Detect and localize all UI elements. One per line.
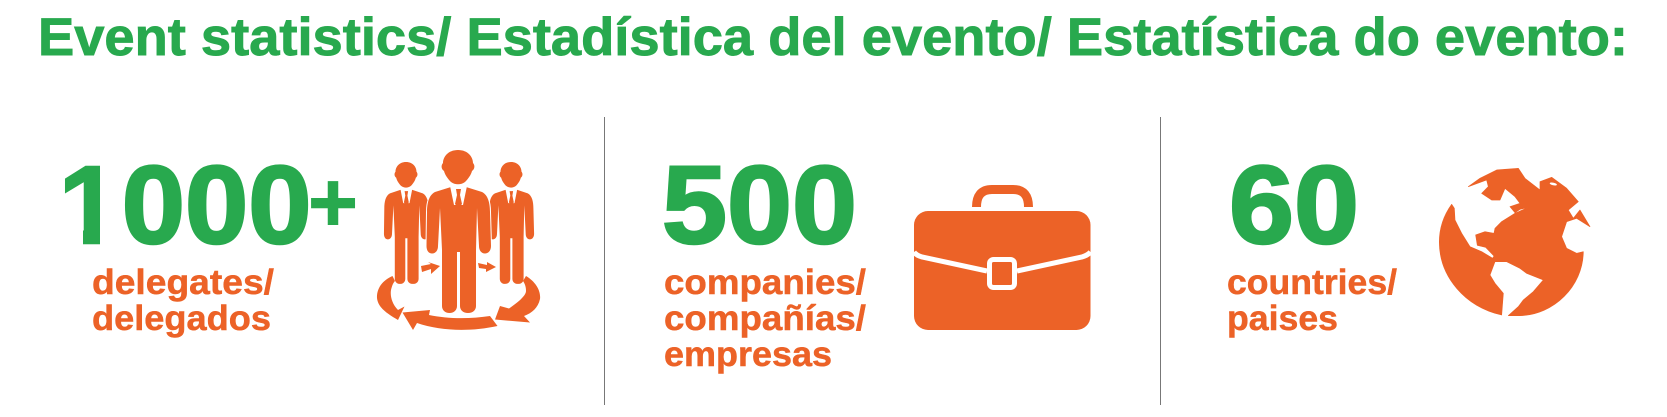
- icon: briefcase: [914, 190, 1090, 330]
- title: Event statistics/ Estadística del evento/ Estatística do evento:: [38, 8, 1628, 67]
- centre person: [426, 150, 491, 313]
- label: delegates: [92, 263, 274, 338]
- icon: business people with arrows: [377, 150, 540, 330]
- label: countries: countries/: [1227, 263, 1397, 302]
- panel: countries: [1227, 144, 1590, 338]
- number: 1000: 1000: [58, 144, 312, 267]
- icon: globe: [1439, 168, 1590, 316]
- label: companies: companies/: [664, 263, 866, 302]
- label: companies: empresas: [664, 335, 832, 374]
- plus sign: +: [308, 155, 358, 249]
- panel: companies: [662, 144, 1090, 374]
- label: delegates: delegados: [92, 299, 271, 338]
- briefcase body: [914, 211, 1090, 330]
- small arrow right: [478, 262, 496, 272]
- number: 500: 500: [662, 144, 857, 267]
- briefcase handle: [976, 190, 1028, 207]
- right person: [489, 162, 534, 284]
- panel: delegates: [58, 144, 540, 338]
- label: delegates: delegates/: [92, 263, 274, 302]
- label: companies: [664, 263, 866, 374]
- number: 60: 60: [1229, 144, 1359, 267]
- label: countries: [1227, 263, 1397, 338]
- curved arrow bottom: [402, 310, 498, 330]
- label: countries: paises: [1227, 299, 1338, 338]
- small arrow left: [421, 262, 440, 274]
- briefcase clasp: [990, 260, 1014, 288]
- globe small lake: [1549, 182, 1557, 186]
- label: companies: compañías/: [664, 299, 866, 338]
- curved arrow left: [377, 276, 404, 320]
- left person: [384, 162, 429, 284]
- briefcase flap strap: [914, 252, 1090, 271]
- curved arrow right: [495, 276, 540, 322]
